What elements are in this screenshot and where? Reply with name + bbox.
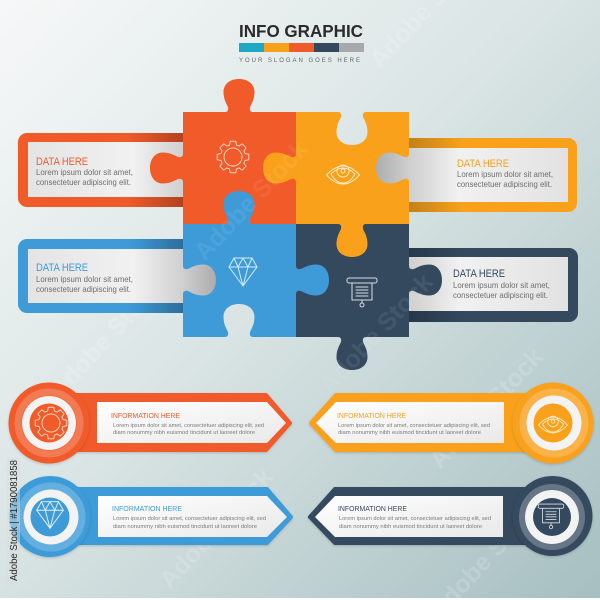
heading: yellow information: INFORMATION HERE xyxy=(337,413,406,420)
text: dark information: diam nonummy nibh euismod tincidunt ut laoreet dolore xyxy=(339,524,482,530)
watermarks: Adobe Stock xyxy=(44,273,169,404)
band: dark xyxy=(310,489,540,543)
panel: red data xyxy=(18,133,220,207)
icon: eye xyxy=(326,165,360,184)
heading: blue data: DATA HERE xyxy=(36,262,88,274)
heading: dark information: INFORMATION HERE xyxy=(338,506,407,513)
heading: yellow data: DATA HERE xyxy=(457,158,509,170)
text: red information xyxy=(113,423,264,436)
text: blue information: diam nonummy nibh euismod tincidunt ut laoreet dolore xyxy=(113,524,257,530)
text: dark information: Lorem ipsum dolor sit amet, consectetuer adipiscing elit, sed xyxy=(339,516,491,522)
band: blue xyxy=(60,489,291,543)
text: dark data: consectetuer adipiscing elit. xyxy=(453,291,548,300)
faint watermarks over the puzzle: Adobe Stock xyxy=(189,135,314,266)
band: red xyxy=(60,395,290,450)
stock id label: Adobe Stock | #1790081858 xyxy=(8,460,20,581)
text: red data xyxy=(36,168,133,187)
panel: blue data xyxy=(18,239,220,313)
text area: yellow xyxy=(316,402,504,443)
watermarks: Adobe Stock xyxy=(154,463,279,594)
text: dark data: Lorem ipsum dolor sit amet, xyxy=(453,281,550,290)
colour bar xyxy=(239,43,364,52)
text area: blue xyxy=(98,496,287,537)
icon: diamond xyxy=(229,258,257,286)
text: yellow information: diam nonummy nibh euismod tincidunt ut laoreet dolore xyxy=(338,430,481,436)
text: blue data: consectetuer adipiscing elit. xyxy=(36,285,131,294)
puzzle piece: blue xyxy=(183,191,329,337)
heading: red data: DATA HERE xyxy=(36,156,88,168)
title block xyxy=(239,21,364,64)
text: blue data: Lorem ipsum dolor sit amet, xyxy=(36,275,133,284)
slogan: YOUR SLOGAN GOES HERE xyxy=(239,58,360,64)
text: dark data xyxy=(453,281,550,300)
heading: red information: INFORMATION HERE xyxy=(111,413,180,420)
watermarks: Adobe Stock xyxy=(424,343,549,474)
title: INFO GRAPHIC xyxy=(239,21,363,41)
text: red information: Lorem ipsum dolor sit amet, consectetuer adipiscing elit, sed xyxy=(113,423,264,429)
puzzle piece: dark xyxy=(296,224,442,370)
text: blue information xyxy=(113,516,266,530)
circle badge: red xyxy=(8,382,90,464)
banner: yellow information xyxy=(311,382,594,464)
text area: red xyxy=(97,402,286,443)
puzzle xyxy=(150,79,442,370)
text: yellow information: Lorem ipsum dolor sit amet, consectetuer adipiscing elit, sed xyxy=(338,423,490,429)
text: yellow information xyxy=(338,423,490,436)
text: dark information xyxy=(339,516,491,530)
puzzle piece: red xyxy=(150,79,296,224)
circle badge: blue xyxy=(10,476,90,557)
text: yellow data: consectetuer adipiscing elit. xyxy=(457,180,552,189)
faint watermarks over the puzzle xyxy=(189,135,439,399)
text: red data: Lorem ipsum dolor sit amet, xyxy=(36,168,133,177)
circle badge: dark xyxy=(512,476,592,556)
faint watermarks over the puzzle: Adobe Stock xyxy=(314,268,439,399)
banner: blue information xyxy=(10,476,291,557)
text: yellow data: Lorem ipsum dolor sit amet, xyxy=(457,170,553,179)
text area: dark xyxy=(315,496,503,537)
text: blue information: Lorem ipsum dolor sit amet, consectetuer adipiscing elit, sed xyxy=(113,516,266,522)
icon: presentation board xyxy=(347,278,377,307)
banner: red information xyxy=(8,382,290,464)
text: blue data xyxy=(36,275,133,294)
text: red information: diam nonummy nibh euismod tincidunt ut laoreet dolore xyxy=(113,430,255,436)
banner: dark information xyxy=(310,476,592,556)
band: yellow xyxy=(311,395,540,450)
heading: blue information: INFORMATION HERE xyxy=(112,506,182,513)
circle badge: yellow xyxy=(512,382,594,464)
text: red data: consectetuer adipiscing elit. xyxy=(36,178,131,187)
icon: gear xyxy=(217,141,249,173)
panel: yellow data xyxy=(370,138,577,212)
puzzle piece: yellow xyxy=(263,112,409,257)
heading: dark data: DATA HERE xyxy=(453,268,505,280)
panel: dark data xyxy=(370,248,578,322)
text: yellow data xyxy=(457,170,553,189)
